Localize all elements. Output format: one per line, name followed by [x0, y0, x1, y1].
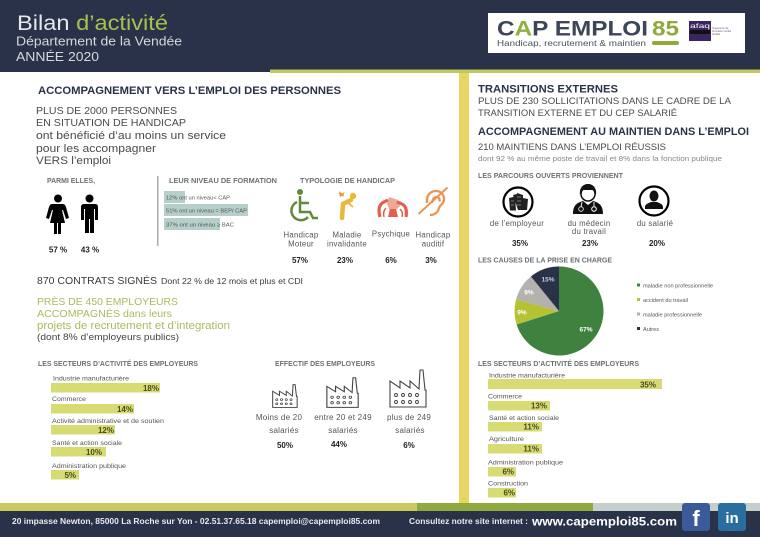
text block: sollicitations — [478, 96, 732, 119]
heading: maintien dans l'emploi: ACCOMPAGNEMENT AU MAINTIEN DANS L’EMPLOI — [478, 126, 749, 138]
heading: parmi elles: PARMI ELLES, — [47, 178, 95, 185]
value: 20%: 20% — [649, 239, 665, 248]
icon: wheelchair — [291, 189, 318, 220]
text block: plus de 2000 personnes: PLUS DE 2000 PERSONNES — [36, 105, 177, 117]
text block: sollicitations: TRANSITION EXTERNE ET DU CEP SALARIÉ — [478, 108, 677, 119]
bar chart: secteurs employeurs (droite): Construction — [488, 480, 529, 488]
icon: facebook: f — [692, 506, 700, 531]
vertical yellow divider — [459, 73, 469, 503]
bar chart: secteurs employeurs (gauche): 10% — [86, 448, 102, 457]
text block: contrats signés — [37, 274, 303, 287]
heading: effectif: EFFECTIF DES EMPLOYEURS — [275, 361, 375, 368]
panel: causes de la prise en charge — [478, 258, 713, 356]
label: entre 20 et 249: salariés — [328, 426, 358, 435]
icon: medium factory — [327, 378, 358, 407]
label: handicap auditif: auditif — [422, 240, 445, 248]
text block: employeurs accompagnés: projets de recrutement et d’integration — [37, 320, 230, 332]
logo: Cap Emploi 85 — [488, 13, 745, 53]
panel: header — [0, 0, 760, 73]
bar chart: secteurs employeurs (droite): 11% — [523, 444, 539, 454]
label: psychique: Psychique — [372, 230, 410, 238]
pie chart — [515, 266, 604, 356]
label: handicap moteur: Handicap — [284, 230, 319, 240]
label: handicap auditif: Handicap — [416, 230, 451, 240]
value: 6%: 6% — [403, 441, 415, 450]
pie chart: 9% — [524, 290, 534, 296]
logo: Cap Emploi 85: 85 — [652, 18, 679, 40]
label: plus de 249: plus de 249 — [387, 413, 431, 422]
bar chart: secteurs employeurs (droite): 6% — [503, 488, 515, 498]
logo: Cap Emploi 85: CAP EMPLOI — [497, 18, 648, 40]
bar chart: secteurs employeurs (droite) — [478, 359, 662, 498]
label: handicap moteur: Moteur — [288, 240, 314, 248]
heading: typologie: TYPOLOGIE DE HANDICAP — [300, 178, 395, 185]
pie chart: 9% — [517, 310, 527, 316]
value: invalidante: 23% — [337, 256, 353, 265]
icon: médecin — [573, 184, 603, 214]
value: 35%: 35% — [512, 239, 528, 248]
heading: secteurs droite: LES SECTEURS D’ACTIVITÉ DES EMPLOYEURS — [478, 359, 639, 368]
text block: plus de 2000 personnes: pour les accompagner — [36, 143, 156, 155]
icon: linkedin: in — [725, 510, 739, 527]
value: moteur: 57% — [292, 256, 308, 265]
legend — [637, 284, 713, 333]
panel: niveau de formation: 51% ont un niveau = BEP/ CAP — [166, 208, 247, 214]
bar chart: secteurs employeurs (gauche) — [38, 359, 198, 480]
icon: salarié — [640, 186, 668, 216]
bar chart: secteurs employeurs (droite): Santé et action sociale — [489, 415, 560, 422]
label: moins de 20: Moins de 20 — [256, 413, 302, 422]
logo: Cap Emploi 85: afaq — [690, 24, 710, 30]
label: de l'employeur: de l’employeur — [490, 219, 544, 228]
value: auditif: 3% — [425, 256, 437, 265]
bar chart: secteurs employeurs (gauche): Activité administrative et de soutien — [52, 418, 165, 425]
panel: parcours ouverts — [478, 173, 673, 248]
heading: accompagnement vers l'emploi: ACCOMPAGNEMENT VERS L’EMPLOI DES PERSONNES — [38, 85, 341, 97]
label: maladie invalidante: Maladie — [332, 230, 362, 240]
label: plus de 249: salariés — [395, 426, 425, 435]
pie chart: 67% — [579, 326, 593, 334]
value: 23%: 23% — [582, 239, 598, 248]
label: entre 20 et 249: entre 20 et 249 — [314, 413, 372, 422]
icon: employeur — [504, 188, 532, 216]
value: men: 43 % — [81, 246, 99, 254]
label: du salarié: du salarié — [637, 219, 673, 228]
text block: contrats signés: 870 CONTRATS SIGNÉS — [37, 274, 157, 287]
bar chart: secteurs employeurs (gauche): Industrie manufacturière — [53, 376, 130, 382]
bar chart: secteurs employeurs (droite): Agriculture — [489, 436, 525, 443]
separator line — [157, 176, 158, 246]
pie chart: 15% — [541, 276, 555, 284]
icon: large factory — [390, 370, 426, 407]
bar chart: secteurs employeurs (droite): 13% — [531, 402, 547, 410]
panel: footer — [0, 503, 760, 537]
text block: employeurs accompagnés — [37, 295, 230, 343]
panel: typologie de handicap — [284, 178, 451, 265]
panel: parmi elles — [46, 178, 99, 254]
text block: sollicitations: PLUS DE 230 SOLLICITATIONS DANS LE CADRE DE LA — [478, 96, 732, 107]
subtitle: department: Département de la Vendée — [16, 34, 182, 48]
text block: dont 92 %: dont 92 % au même poste de travail et 8% dans la fonction publique — [478, 154, 722, 163]
label: maladie invalidante: invalidante — [327, 240, 367, 248]
text block: contrats signés: Dont 22 % de 12 mois et plus et CDI — [161, 277, 303, 286]
heading: secteurs: LES SECTEURS D’ACTIVITÉ DES EMPLOYEURS — [38, 359, 198, 368]
logo: Cap Emploi 85: Qualité — [712, 32, 721, 36]
icon: man — [81, 194, 98, 233]
value: women: 57 % — [49, 246, 67, 254]
heading: transitions externes: TRANSITIONS EXTERNES — [478, 84, 618, 96]
icon: woman — [46, 194, 69, 234]
bar chart: secteurs employeurs (droite): 6% — [502, 468, 514, 476]
bar chart: secteurs employeurs (droite): 35% — [640, 380, 656, 390]
value: psychique: 6% — [385, 256, 397, 265]
icon: linkedin — [718, 503, 746, 531]
label: du médecin du travail: du médecin — [568, 219, 610, 228]
title: Bilan d’activité — [17, 12, 168, 35]
panel: niveau de formation: 12% ont un niveau< CAP — [166, 196, 230, 202]
text block: 210 maintiens: 210 MAINTIENS DANS L’EMPLOI RÉUSSIS — [478, 142, 666, 153]
bar chart: secteurs employeurs (gauche): 14% — [117, 405, 133, 414]
bar chart: secteurs employeurs (gauche): Santé et action sociale — [52, 440, 123, 447]
text block: plus de 2000 personnes — [36, 105, 226, 167]
footer: website label: Consultez notre site internet : — [409, 517, 528, 526]
label: moins de 20: salariés — [269, 426, 299, 435]
bar chart: secteurs employeurs (droite): 11% — [523, 422, 539, 432]
footer: address: 20 impasse Newton, 85000 La Roche sur Yon - 02.51.37.65.18 capemploi@capemploi85.com — [12, 517, 380, 526]
heading: niveau de formation: LEUR NIVEAU DE FORMATION — [169, 178, 277, 185]
text block: plus de 2000 personnes: EN SITUATION DE HANDICAP — [36, 117, 186, 129]
footer: website url: www.capemploi85.com — [531, 514, 677, 528]
value: 44%: 44% — [331, 440, 347, 449]
icon: psychique — [379, 197, 406, 217]
bar chart: secteurs employeurs (gauche): Administration publique — [52, 463, 127, 470]
value: 50%: 50% — [277, 441, 293, 450]
text block: plus de 2000 personnes: VERS l’emploi — [36, 155, 111, 167]
label: du médecin du travail: du travail — [572, 227, 606, 236]
logo: Cap Emploi 85: Handicap, recrutement & maintien — [497, 38, 646, 48]
panel: niveau de formation: 37% ont un niveau ≥ BAC — [166, 222, 234, 228]
panel: effectif des employeurs — [256, 361, 431, 450]
heading: parcours: LES PARCOURS OUVERTS PROVIENNENT — [478, 173, 624, 180]
bar chart: secteurs employeurs (gauche): Commerce — [52, 396, 87, 403]
bar chart: secteurs employeurs (gauche): 18% — [143, 384, 159, 393]
text block: plus de 2000 personnes: ont bénéficié d’au moins un service — [36, 130, 226, 142]
bar chart: secteurs employeurs (droite): Administration publique — [488, 460, 564, 466]
text block: employeurs accompagnés: (dont 8% d’employeurs publics) — [37, 332, 179, 343]
heading: causes: LES CAUSES DE LA PRISE EN CHARGE — [478, 258, 612, 264]
bar chart: secteurs employeurs (gauche): 5% — [64, 471, 76, 480]
panel: niveau de formation — [164, 178, 277, 230]
icon: facebook — [682, 503, 710, 531]
bar chart: secteurs employeurs (droite): Commerce — [488, 394, 523, 400]
text block: employeurs accompagnés: ACCOMPAGNÉS dans leurs — [37, 307, 172, 320]
icon: small factory — [273, 385, 297, 407]
text block: employeurs accompagnés: PRÈS DE 450 EMPLOYEURS — [37, 295, 178, 308]
icon: handicap auditif — [418, 188, 448, 215]
icon: maladie invalidante — [338, 191, 356, 218]
legend: Autres — [643, 327, 659, 333]
subtitle: year: ANNÉE 2020 — [16, 49, 99, 64]
legend: accident du travail — [643, 298, 688, 304]
bar chart: secteurs employeurs (droite): Industrie manufacturière — [489, 372, 566, 380]
legend: maladie non professionnelle — [643, 284, 713, 290]
bar chart: secteurs employeurs (gauche): 12% — [98, 426, 114, 435]
logo: Cap Emploi 85: formation certifié — [712, 29, 732, 33]
logo: Cap Emploi 85: Organisme de — [712, 26, 729, 30]
legend: maladie professionnelle — [643, 312, 702, 318]
